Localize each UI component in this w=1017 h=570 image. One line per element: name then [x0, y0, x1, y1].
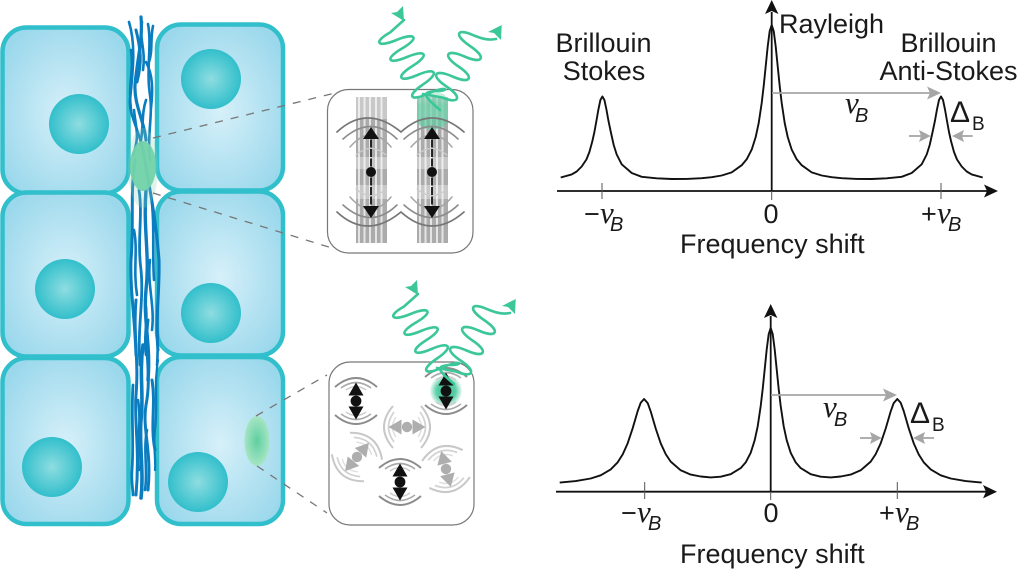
tick labels: B: [610, 214, 623, 236]
tick labels: [621, 494, 919, 535]
extracellular fibres: [129, 17, 159, 498]
tick labels: B: [906, 513, 919, 535]
cell: bottom left: [2, 358, 128, 524]
oscillator black 3: [379, 459, 421, 505]
scattered light: bottom: [393, 280, 516, 384]
grey arrows: [772, 86, 973, 142]
scattered light: top: [379, 6, 502, 110]
fibre column right: [417, 97, 448, 243]
tick labels: ν: [600, 195, 614, 230]
tick labels: −: [621, 498, 637, 528]
tick labels: B: [648, 513, 661, 535]
tick labels: ν: [937, 195, 951, 230]
tick labels: ν: [895, 494, 909, 529]
tick labels: 0: [763, 498, 779, 528]
oscillator pair: [363, 127, 440, 218]
green focus on fibre: [417, 92, 448, 129]
fibre column left: [356, 97, 387, 243]
focus volume: extracellular: [130, 141, 156, 191]
x axis title: Frequency shift: [680, 539, 865, 569]
peak labels: [555, 9, 1017, 86]
lens: disordered phonons: [326, 362, 474, 525]
tick labels: ν: [637, 494, 651, 529]
peak labels: Stokes: [563, 56, 645, 86]
shift and width labels: B: [834, 409, 847, 431]
shift and width labels: [823, 389, 945, 436]
cell: top left: [2, 28, 128, 194]
shift and width labels: [845, 85, 985, 135]
tick labels: −: [584, 199, 600, 229]
oscillator black 1: [335, 378, 377, 424]
shift and width labels: ν: [845, 85, 859, 120]
oscillator grey 2: [326, 426, 388, 488]
axes: [556, 304, 997, 500]
tick labels: B: [948, 214, 961, 236]
peak labels: Brillouin: [555, 28, 652, 58]
tick labels: +: [879, 498, 895, 528]
shift and width labels: ν: [823, 389, 837, 424]
shift and width labels: B: [972, 114, 985, 135]
oscillator grey 3: [420, 441, 472, 497]
spectrum chart: bottom: [556, 304, 997, 569]
green focus glow: [430, 375, 462, 407]
grey arrows: [771, 388, 934, 444]
x axis title: Frequency shift: [680, 229, 865, 259]
shift and width labels: Δ: [950, 96, 970, 129]
spectrum curve: [561, 25, 983, 179]
oscillator black 2: [425, 368, 467, 414]
peak labels: Anti-Stokes: [879, 56, 1017, 86]
focus halo: tissue: [128, 128, 158, 208]
shift and width labels: Δ: [910, 397, 930, 430]
acoustic wavefronts: [337, 118, 464, 226]
spectrum curve: [560, 328, 982, 483]
shift and width labels: B: [932, 415, 945, 436]
zoom guide lines: [153, 93, 335, 513]
cell: middle right: [157, 192, 283, 356]
axes: [557, 0, 998, 200]
spectrum chart: top: [555, 0, 1017, 259]
tick labels: 0: [763, 199, 779, 229]
tick labels: [584, 195, 961, 236]
focus volume: intracellular: [244, 416, 270, 466]
shift and width labels: B: [855, 105, 868, 127]
cell: bottom right: [157, 357, 283, 524]
cell: top right: [157, 24, 283, 190]
lens: ordered fibres: [328, 90, 473, 253]
tick labels: +: [921, 199, 937, 229]
peak labels: Brillouin: [900, 28, 997, 58]
peak labels: Rayleigh: [779, 9, 884, 39]
oscillator grey 1: [384, 406, 430, 448]
cell: middle left: [2, 192, 128, 356]
